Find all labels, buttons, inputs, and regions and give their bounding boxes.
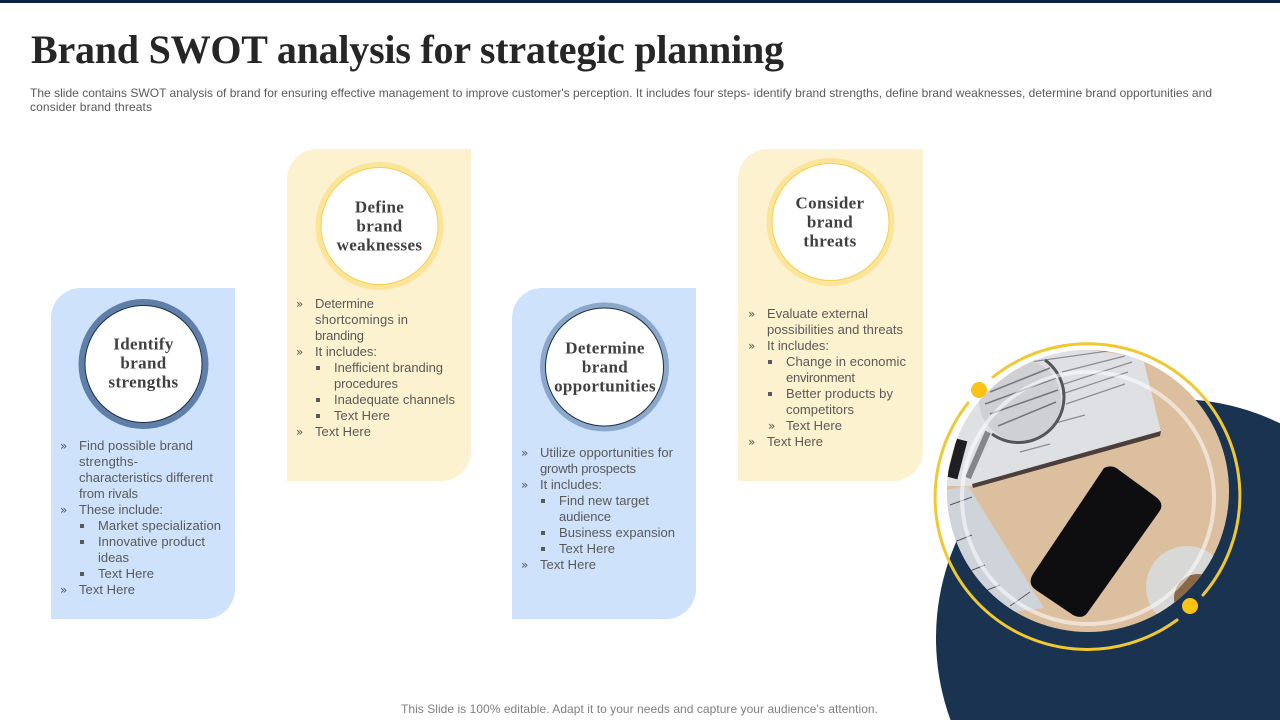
heading: Consider <box>796 194 865 212</box>
bullet list: It includes: <box>540 477 602 492</box>
heading: brand <box>120 354 167 372</box>
bullet list: It includes: <box>315 344 377 359</box>
icon: heading circle <box>540 302 669 432</box>
heading: brand <box>582 358 628 376</box>
panel: consider brand threats <box>738 149 923 481</box>
bullet list: » <box>296 425 303 439</box>
heading: strengths <box>109 372 178 392</box>
phone <box>1031 466 1161 617</box>
heading: threats <box>803 232 857 250</box>
bullet list: Inefficient branding <box>334 360 443 375</box>
bullet list: Text Here <box>79 582 135 597</box>
description <box>30 86 1212 114</box>
bullet list: Text Here <box>540 557 596 572</box>
bullet list: branding <box>315 328 364 343</box>
bullet list: » <box>748 339 755 353</box>
bullet list: » <box>521 478 528 492</box>
bullet list: » <box>521 558 528 572</box>
card background <box>512 288 696 619</box>
bullet list <box>296 296 456 439</box>
top bar <box>0 0 1280 3</box>
bullet list: Text Here <box>786 418 842 433</box>
bullet list: Utilize opportunities for <box>540 445 674 460</box>
bullet list: audience <box>559 509 611 524</box>
heading <box>337 198 422 254</box>
cup <box>1146 546 1214 614</box>
bullet list <box>748 306 906 449</box>
icon: heading circle <box>78 299 208 429</box>
bullet list: Text Here <box>334 408 390 423</box>
heading: opportunities <box>554 376 656 396</box>
bullet list: competitors <box>786 402 854 417</box>
bullet list: environment <box>786 370 855 385</box>
bullet list: procedures <box>334 376 398 391</box>
bullet list: Business expansion <box>559 525 675 540</box>
footer note: This Slide is 100% editable. Adapt it to your needs and capture your audience's attention. <box>401 702 878 716</box>
bullet list: » <box>768 419 775 433</box>
card background <box>287 149 471 481</box>
heading: weaknesses <box>337 236 422 254</box>
icon: heading circle <box>316 162 444 290</box>
bullet list: » <box>60 583 67 597</box>
card background <box>738 149 923 481</box>
bullet list: » <box>60 439 67 453</box>
bullet list: It includes: <box>767 338 829 353</box>
bullet list: » <box>748 435 755 449</box>
bullet list: » <box>296 297 303 311</box>
heading <box>109 334 178 392</box>
bullet list: Better products by <box>786 386 894 401</box>
bullet list: Change in economic <box>786 354 906 369</box>
bullet list: Text Here <box>559 541 615 556</box>
bullet list: strengths- <box>79 454 138 469</box>
yellow dot bottom right <box>1182 598 1198 614</box>
heading <box>554 338 656 396</box>
heading <box>796 194 865 250</box>
bullet list: Find new target <box>559 493 649 508</box>
bullet list: Text Here <box>767 434 823 449</box>
bullet list: shortcomings in <box>315 312 408 327</box>
panel: identify brand strengths <box>51 288 235 619</box>
bullet list: » <box>296 345 303 359</box>
bullet list: » <box>60 503 67 517</box>
bullet list: Text Here <box>98 566 154 581</box>
bullet list: Text Here <box>315 424 371 439</box>
bullet list: Determine <box>315 296 374 311</box>
magnifier <box>979 359 1061 441</box>
bullet list: » <box>748 307 755 321</box>
heading: brand <box>356 216 403 236</box>
bullet list: characteristics different <box>79 470 213 485</box>
heading: Determine <box>565 338 645 358</box>
bullet list: Innovative product <box>98 534 205 549</box>
photo: desk with phone, magnifier and papers <box>945 345 1231 634</box>
description: The slide contains SWOT analysis of brand for ensuring effective management to improve customer's perception. It includes four steps- identify brand strengths, define brand weaknesses, determine brand opportunities and <box>30 86 1212 100</box>
bullet list: from rivals <box>79 486 138 501</box>
yellow ring <box>935 344 1240 649</box>
bullet list: Find possible brand <box>79 438 193 453</box>
yellow dot top left <box>971 382 987 398</box>
papers <box>945 345 1161 486</box>
bullet list: Evaluate external <box>767 306 868 321</box>
card background <box>51 288 235 619</box>
bullet list <box>60 438 221 597</box>
description: consider brand threats <box>30 100 152 114</box>
bullet list: possibilities and threats <box>767 322 904 337</box>
bullet list: Inadequate channels <box>334 392 456 407</box>
heading: Define <box>355 198 404 216</box>
panel: define brand weaknesses <box>287 149 471 481</box>
navy background circle <box>936 399 1280 720</box>
bullet list: growth prospects <box>540 461 636 476</box>
panel: determine brand opportunities <box>512 288 696 619</box>
bullet list: » <box>521 446 528 460</box>
bullet list: ideas <box>98 550 130 565</box>
title: Brand SWOT analysis for strategic planning <box>31 27 784 72</box>
bullet list: Market specialization <box>98 518 221 533</box>
heading: brand <box>807 212 853 232</box>
heading: Identify <box>113 334 174 354</box>
bullet list: These include: <box>79 502 163 517</box>
bullet list <box>521 445 675 572</box>
icon: heading circle <box>766 158 894 286</box>
